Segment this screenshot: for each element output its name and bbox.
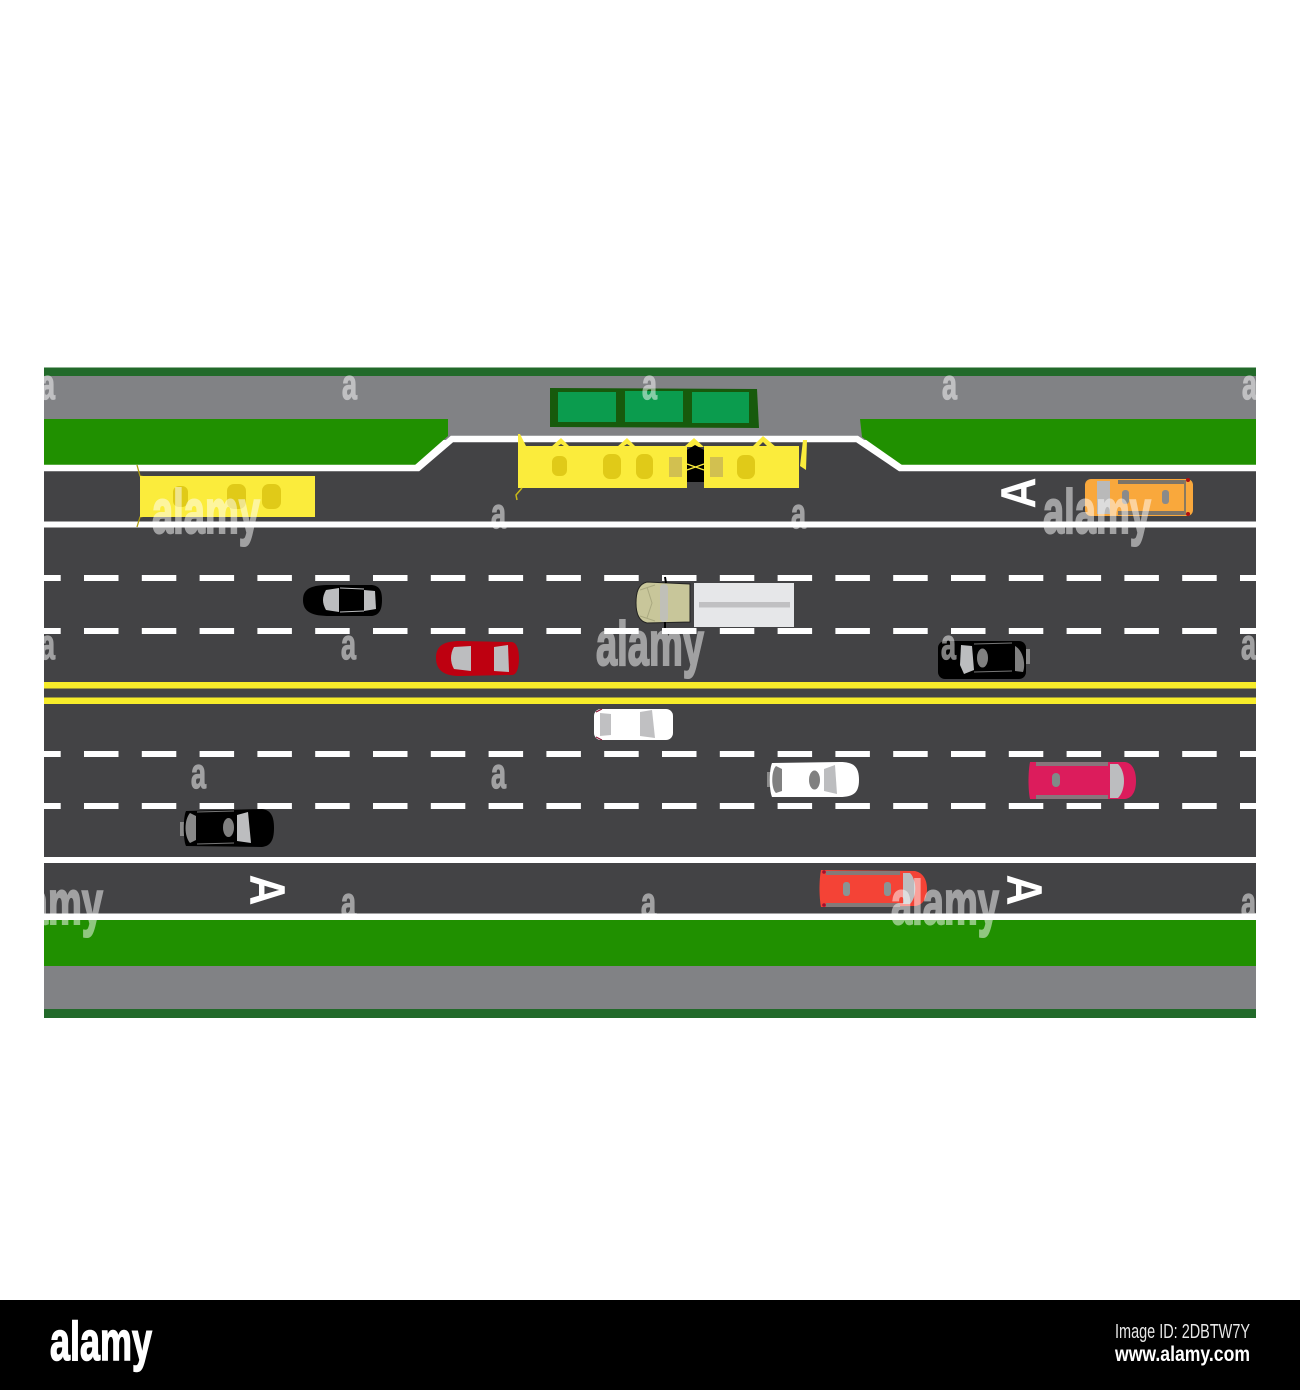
- stock watermarks: small letters: a: [1241, 621, 1257, 669]
- bus stop shelter: [550, 388, 759, 428]
- lane edge lines: [44, 522, 1256, 920]
- road marking letter A, top right lane: A: [992, 478, 1046, 508]
- delivery truck: [636, 577, 794, 628]
- stock watermarks: small letters: a: [942, 361, 958, 409]
- stock watermarks: large wordmarks: [0, 478, 1151, 938]
- stock watermarks: small letters: a: [491, 750, 507, 798]
- black SUV right: [938, 641, 1030, 679]
- stock watermarks: small letters: a: [341, 879, 357, 927]
- stock watermarks: large wordmarks: alamy: [152, 478, 260, 547]
- bus in left bay lane: [137, 465, 315, 527]
- stock watermarks: small letters: [40, 361, 1258, 927]
- stock watermarks: small letters: a: [791, 490, 807, 538]
- stock watermarks: small letters: a: [191, 750, 207, 798]
- black SUV left: [180, 809, 274, 847]
- black sedan: [303, 585, 382, 616]
- red sedan: [436, 641, 519, 676]
- stock watermarks: small letters: a: [642, 361, 658, 409]
- stock watermarks: small letters: a: [1241, 879, 1257, 927]
- magenta van: [1028, 762, 1136, 799]
- stock watermarks: large wordmarks: alamy: [891, 869, 999, 938]
- curb line with bus bay: [44, 439, 1256, 468]
- stock watermarks: small letters: a: [40, 361, 56, 409]
- stock watermarks: large wordmarks: alamy: [1043, 478, 1151, 547]
- bus at stop: [516, 434, 807, 500]
- road marking letter A, bottom right lane: A: [996, 874, 1052, 906]
- panel: asphalt carriageway: [44, 439, 1256, 916]
- stock watermarks: small letters: a: [1242, 361, 1258, 409]
- panel: top pavement: [44, 368, 1256, 440]
- stock watermarks: small letters: a: [40, 621, 56, 669]
- stock watermarks: small letters: a: [342, 361, 358, 409]
- stock watermarks: small letters: a: [491, 490, 507, 538]
- footer logo: alamy: [50, 1310, 152, 1372]
- road marking letter A, bottom left lane: A: [239, 874, 295, 906]
- panel: top grass verges: [44, 419, 1256, 465]
- white sedan: [594, 709, 673, 740]
- orange van: [1085, 478, 1193, 516]
- footer bar: [0, 1300, 1300, 1390]
- stock watermarks: small letters: a: [641, 879, 657, 927]
- panel: bottom grass verge and pavement: [44, 920, 1256, 1018]
- website: www.alamy.com: [1114, 1343, 1250, 1366]
- image id: Image ID: 2DBTW7Y: [1115, 1321, 1250, 1343]
- stock watermarks: large wordmarks: alamy: [596, 610, 704, 679]
- double yellow centre line: [44, 682, 1256, 704]
- white SUV: [767, 762, 859, 797]
- stock watermarks: small letters: a: [341, 621, 357, 669]
- dashed lane markings: [44, 578, 1256, 806]
- red van: [820, 870, 927, 907]
- stock watermarks: small letters: a: [941, 621, 957, 669]
- stock watermarks: large wordmarks: alamy: [0, 869, 103, 938]
